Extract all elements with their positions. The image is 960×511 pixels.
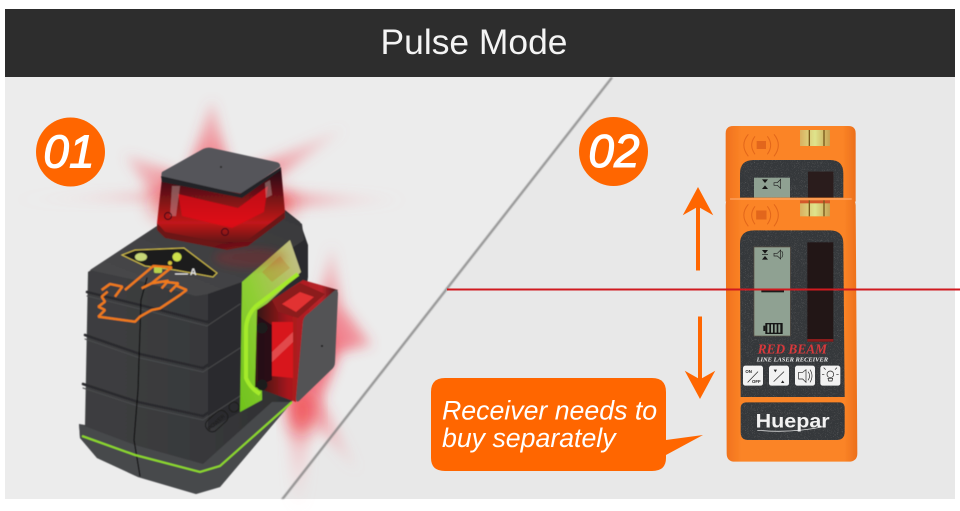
LCD display bbox=[754, 247, 790, 336]
body bbox=[79, 210, 308, 494]
embossed power label: POWER bbox=[207, 414, 227, 432]
green stripe bbox=[82, 402, 292, 472]
embossed power label bbox=[203, 402, 239, 434]
buttons: OFF bbox=[752, 379, 761, 384]
glow core: top module bbox=[150, 183, 294, 227]
diagonal divider bbox=[281, 77, 613, 499]
body ridges bbox=[83, 278, 240, 476]
control panel bbox=[122, 248, 217, 277]
red reflection on body bbox=[214, 248, 286, 268]
red laser line bbox=[447, 288, 960, 290]
sensor window bbox=[807, 242, 833, 342]
brand logo: Huepar bbox=[756, 412, 830, 433]
title: Pulse Mode bbox=[381, 22, 567, 62]
buttons bbox=[743, 366, 840, 386]
hand pointer icon bbox=[98, 266, 187, 322]
glow core: side module bbox=[289, 390, 315, 434]
laser glow: top module bbox=[5, 100, 405, 250]
down arrow bbox=[686, 317, 714, 398]
product subtitle: LINE LASER RECEIVER bbox=[756, 357, 829, 364]
badge 01: 01 bbox=[43, 126, 95, 178]
orange receiver bbox=[726, 126, 857, 462]
bubble level bbox=[800, 200, 830, 216]
green side panel bbox=[240, 240, 301, 412]
front receiver bbox=[726, 198, 857, 462]
laser glow: side module bbox=[230, 245, 372, 511]
control panel bbox=[740, 230, 845, 397]
top module bbox=[157, 148, 285, 250]
badge 02 bbox=[579, 117, 648, 186]
callout text: Receiver needs to bbox=[442, 396, 657, 426]
laser level device bbox=[79, 148, 338, 494]
badge 01 bbox=[36, 118, 105, 186]
up arrow bbox=[684, 188, 712, 270]
product name: RED BEAM bbox=[757, 342, 828, 357]
callout text: buy separately bbox=[442, 423, 617, 453]
callout bbox=[431, 378, 703, 471]
speaker grille bbox=[744, 204, 778, 226]
control panel: A bbox=[190, 267, 197, 277]
rear receiver bbox=[726, 126, 856, 202]
side module bbox=[255, 280, 338, 402]
brand plate bbox=[741, 402, 845, 440]
title bar bbox=[5, 9, 955, 77]
badge 02: 02 bbox=[588, 125, 640, 177]
buttons: ON bbox=[745, 369, 752, 374]
